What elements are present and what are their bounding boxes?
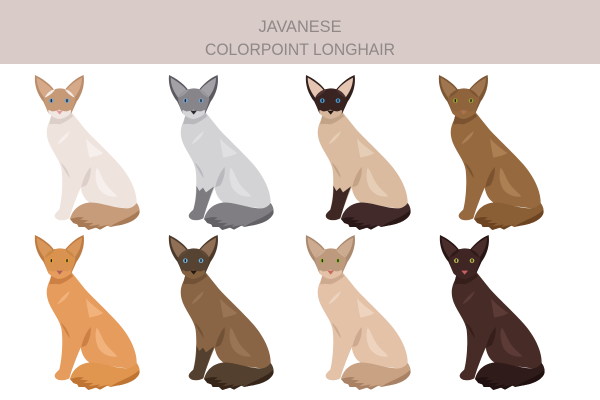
cat: brown with dark points	[169, 235, 274, 390]
cat: silver with grey points	[169, 75, 274, 230]
cat: pale fawn with tan points	[306, 235, 411, 390]
cat: solid orange	[35, 235, 140, 390]
cat: solid dark chocolate	[440, 235, 545, 390]
header banner	[0, 0, 600, 64]
cat: solid hazel brown	[439, 75, 544, 230]
title	[205, 17, 395, 59]
cat: beige with dark brown points	[306, 75, 411, 230]
title: COLORPOINT LONGHAIR	[205, 40, 395, 59]
cat: cream with tan points	[35, 75, 140, 230]
title: JAVANESE	[258, 17, 342, 36]
